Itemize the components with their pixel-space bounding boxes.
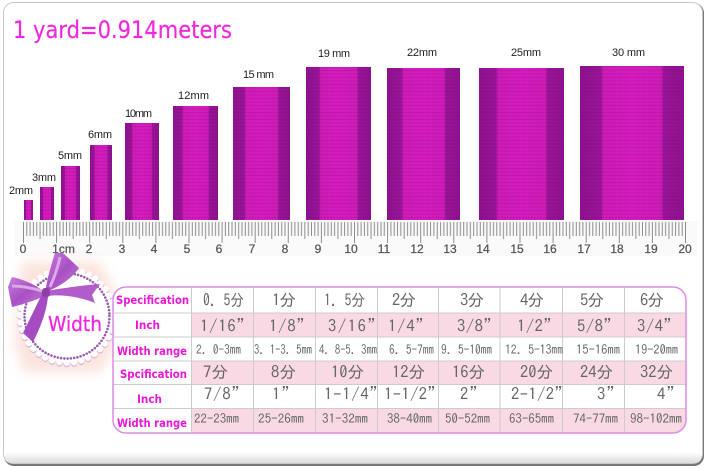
row 5 inch: 1” xyxy=(272,385,298,402)
ribbon size labels: 12mm xyxy=(178,90,209,102)
row 6 width range: 74-77mm xyxy=(573,412,618,425)
row 6 width range: 63-65mm xyxy=(509,412,554,425)
ruler: 8 xyxy=(282,242,289,256)
ribbon size labels: 3mm xyxy=(32,172,56,184)
ruler: 19 xyxy=(644,242,658,256)
ruler: 15 xyxy=(510,242,524,256)
ruler: 17 xyxy=(577,242,591,256)
row 2 inch: 1/8” xyxy=(269,317,313,334)
ruler: 1cm xyxy=(52,242,75,256)
ribbon samples xyxy=(24,66,684,220)
row 4 specification: 32分 xyxy=(640,363,673,380)
ruler: 7 xyxy=(249,242,256,256)
row 3 width range: 9. 5-10mm xyxy=(441,343,492,356)
ribbon size labels: 19 mm xyxy=(318,48,350,60)
row 2 inch: 3/8” xyxy=(457,317,500,334)
ruler: 10 xyxy=(344,242,358,256)
ribbon 10mm xyxy=(125,123,159,220)
ruler: 11 xyxy=(378,242,391,256)
row 4 specification: 8分 xyxy=(271,363,296,380)
ribbon size labels: 10mm xyxy=(125,108,152,120)
ruler xyxy=(14,221,698,256)
table fill and shaded rows xyxy=(113,287,686,433)
row 3 width range: 2. 0-3mm xyxy=(196,343,241,356)
row 2 inch: 3/4” xyxy=(637,317,680,334)
row 1 specification: 4分 xyxy=(520,291,544,308)
ruler: 2 xyxy=(86,242,93,256)
ruler: 14 xyxy=(476,242,490,256)
ribbon size labels: 15 mm xyxy=(243,69,274,81)
bow xyxy=(8,253,100,342)
ribbon 19mm xyxy=(306,67,371,220)
row 3 width range xyxy=(196,343,678,356)
table border xyxy=(113,287,686,433)
row 4 specification xyxy=(203,363,673,380)
row 1 specification: 5分 xyxy=(580,291,604,308)
ribbon 12mm xyxy=(173,106,218,220)
row 3 width range: 3. 1-3. 5mm xyxy=(254,343,312,356)
ribbon size labels: 2mm xyxy=(9,185,33,197)
ribbon 3mm xyxy=(40,187,54,220)
row labels: Spcification xyxy=(120,367,187,381)
ruler: 13 xyxy=(443,242,457,256)
row 1 specification: 2分 xyxy=(392,291,416,308)
ribbon 15mm xyxy=(233,87,290,220)
row 5 inch: 7/8” xyxy=(204,385,248,402)
row 4 specification: 7分 xyxy=(203,363,228,380)
row labels: Inch xyxy=(135,318,160,332)
ribbon size labels: 25mm xyxy=(511,47,541,59)
row 5 inch: 1-1/2” xyxy=(384,385,444,402)
ribbon 2mm xyxy=(24,200,33,220)
ribbon 25mm xyxy=(479,68,564,220)
row 4 specification: 12分 xyxy=(392,363,425,380)
row 5 inch xyxy=(204,385,683,402)
row 6 width range: 50-52mm xyxy=(445,412,490,425)
row 3 width range: 4. 8-5. 3mm xyxy=(319,343,377,356)
row 5 inch: 1-1/4” xyxy=(324,385,386,402)
row 1 specification: 6分 xyxy=(640,291,664,308)
row labels: Width range xyxy=(117,416,187,430)
row 4 specification: 20分 xyxy=(520,363,553,380)
row 6 width range: 31-32mm xyxy=(322,412,368,425)
ruler: 6 xyxy=(216,242,223,256)
row 4 specification: 24分 xyxy=(580,363,613,380)
row 1 specification: 0. 5分 xyxy=(203,291,244,308)
row 6 width range: 22-23mm xyxy=(194,412,239,425)
row 3 width range: 19-20mm xyxy=(635,343,678,356)
ribbon size labels: 22mm xyxy=(407,47,437,59)
row 5 inch: 2” xyxy=(460,385,486,402)
row 4 specification: 10分 xyxy=(331,363,364,380)
ruler: 3 xyxy=(119,242,126,256)
ribbon 6mm xyxy=(90,145,112,220)
row 2 inch xyxy=(200,317,680,334)
ruler: 0 xyxy=(20,242,27,256)
row 1 specification: 3分 xyxy=(460,291,484,308)
ribbon size labels: 6mm xyxy=(88,129,112,141)
ribbon size labels xyxy=(9,47,645,197)
ruler: 20 xyxy=(678,242,692,256)
row 5 inch: 3” xyxy=(597,385,623,402)
row 4 specification: 16分 xyxy=(452,363,485,380)
row 1 specification: 1分 xyxy=(272,291,296,308)
ruler: 4 xyxy=(151,242,158,256)
row labels xyxy=(116,293,189,430)
row 1 specification xyxy=(203,291,664,308)
ribbon size labels: 5mm xyxy=(58,150,82,162)
row 1 specification: 1. 5分 xyxy=(324,291,365,308)
row 6 width range: 25-26mm xyxy=(258,412,304,425)
lace circle xyxy=(20,269,114,364)
row 6 width range: 98-102mm xyxy=(630,412,682,425)
row 2 inch: 1/2” xyxy=(517,317,560,334)
peach backdrop xyxy=(14,262,114,372)
ribbon size labels: 30 mm xyxy=(612,47,645,59)
row 5 inch: 4” xyxy=(657,385,683,402)
width badge with bow xyxy=(8,253,114,372)
row labels: Specification xyxy=(116,293,189,307)
ruler: 9 xyxy=(315,242,322,256)
row 2 inch: 1/16” xyxy=(200,317,253,334)
row 2 inch: 3/16” xyxy=(328,317,384,334)
ruler: 18 xyxy=(610,242,624,256)
row 5 inch: 2-1/2” xyxy=(511,385,571,402)
row labels: Width range xyxy=(117,344,187,358)
row 2 inch: 1/4” xyxy=(388,317,432,334)
title: 1 yard=0.914meters xyxy=(13,16,232,44)
ruler: 5 xyxy=(184,242,191,256)
row 6 width range xyxy=(194,412,682,425)
row labels: Inch xyxy=(137,392,162,406)
ribbon 22mm xyxy=(387,68,460,220)
width label: Width xyxy=(48,312,102,336)
ruler: 12 xyxy=(410,242,424,256)
ribbon 5mm xyxy=(61,166,80,220)
row 2 inch: 5/8” xyxy=(577,317,620,334)
size table xyxy=(113,287,686,433)
row 3 width range: 12. 5-13mm xyxy=(505,343,563,356)
row 6 width range: 38-40mm xyxy=(387,412,432,425)
ruler: 16 xyxy=(543,242,557,256)
row 3 width range: 6. 5-7mm xyxy=(389,343,434,356)
row 3 width range: 15-16mm xyxy=(576,343,620,356)
ribbon 30mm xyxy=(580,66,684,220)
